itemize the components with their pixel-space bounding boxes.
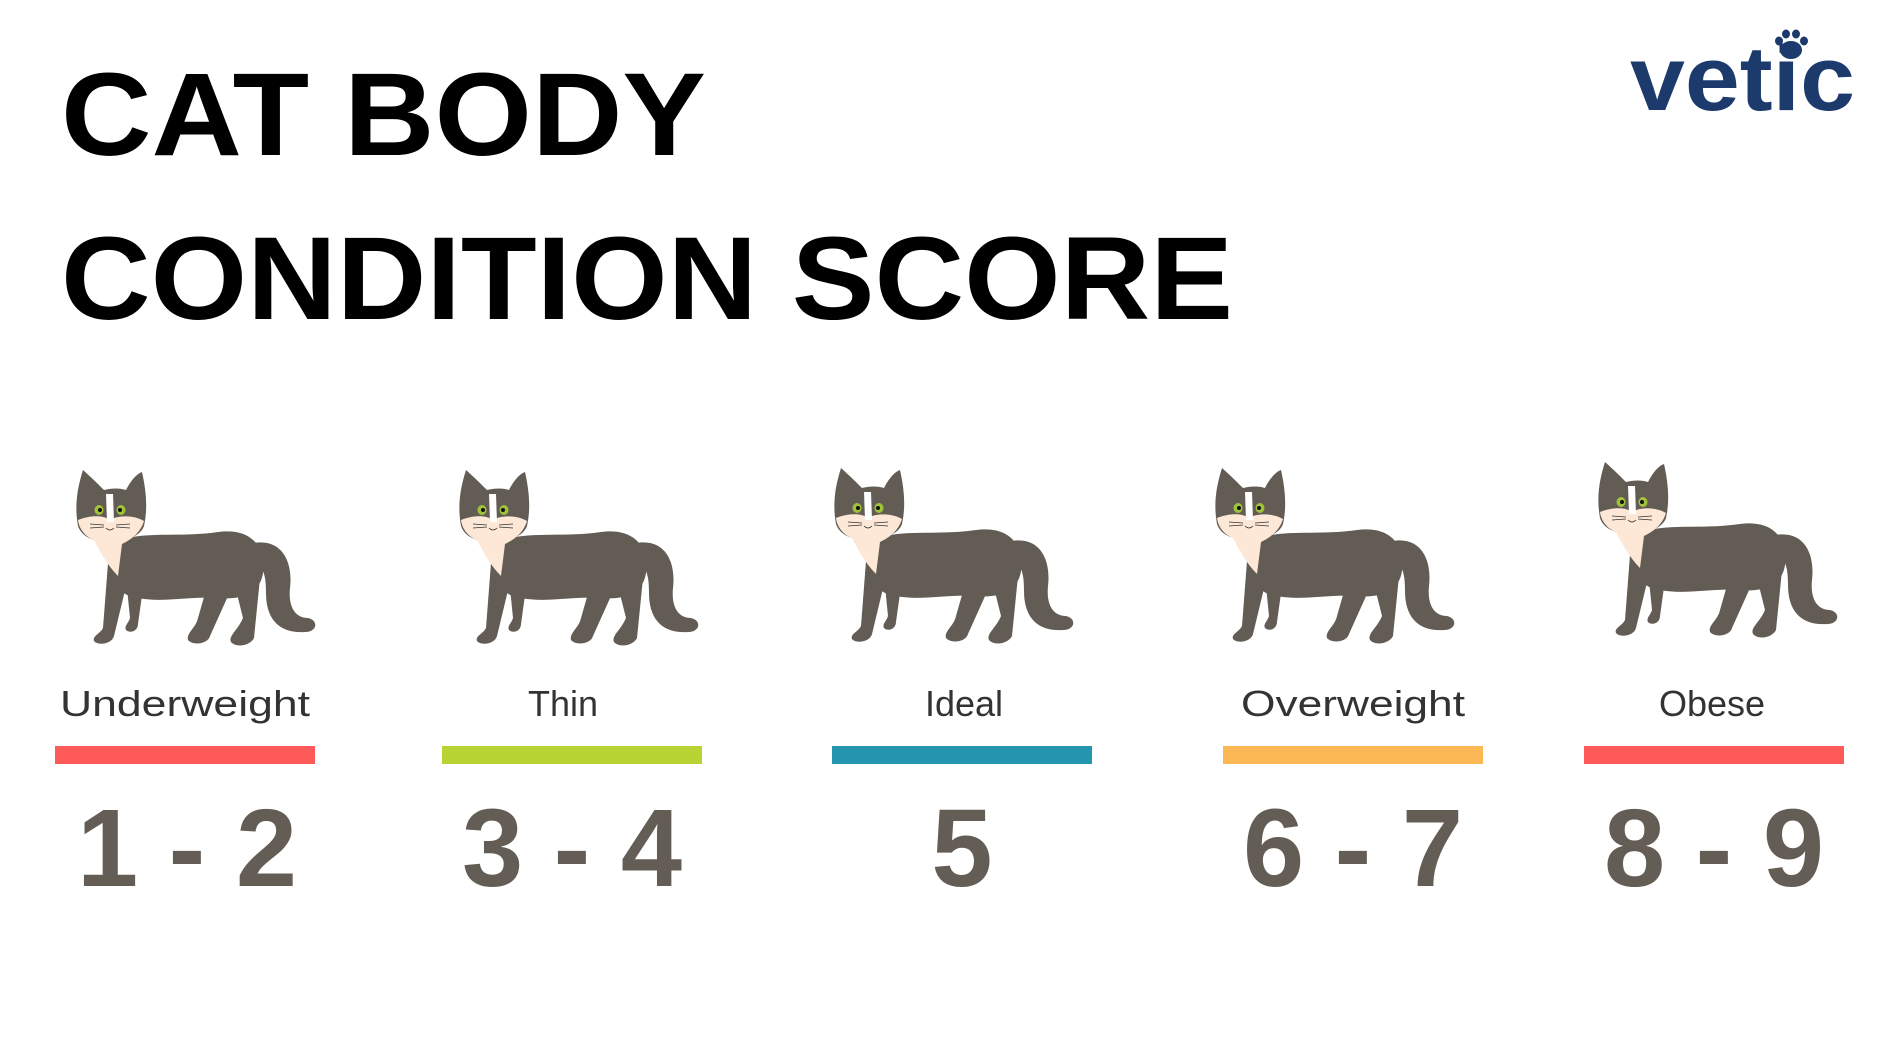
title: CAT BODY	[61, 49, 706, 181]
label: Ideal	[925, 683, 1003, 724]
icon: overweight cat	[1215, 468, 1454, 643]
label: Overweight	[1241, 683, 1465, 724]
column: Underweight	[55, 470, 315, 910]
color bar	[55, 746, 315, 764]
score: 8 - 9	[1604, 787, 1824, 910]
title: CONDITION SCORE	[61, 213, 1233, 345]
title	[61, 49, 1233, 345]
color bar	[1584, 746, 1844, 764]
label: Underweight	[60, 683, 310, 724]
icon: obese cat	[1598, 462, 1837, 637]
score: 5	[931, 787, 993, 910]
column: Ideal	[832, 468, 1092, 910]
score: 1 - 2	[77, 787, 297, 910]
color bar	[1223, 746, 1483, 764]
label: Obese	[1659, 683, 1765, 724]
icon: paw	[1775, 30, 1808, 59]
score: 6 - 7	[1243, 787, 1463, 910]
column: Obese	[1584, 462, 1844, 910]
column: Thin	[442, 470, 702, 910]
color bar	[832, 746, 1092, 764]
icon: underweight cat	[76, 470, 315, 645]
column: Overweight	[1215, 468, 1483, 910]
score: 3 - 4	[462, 787, 682, 910]
icon: thin cat	[459, 470, 698, 645]
logo: vetic: vetic	[1630, 28, 1855, 130]
color bar	[442, 746, 702, 764]
label: Thin	[528, 683, 598, 724]
icon: ideal cat	[834, 468, 1073, 643]
